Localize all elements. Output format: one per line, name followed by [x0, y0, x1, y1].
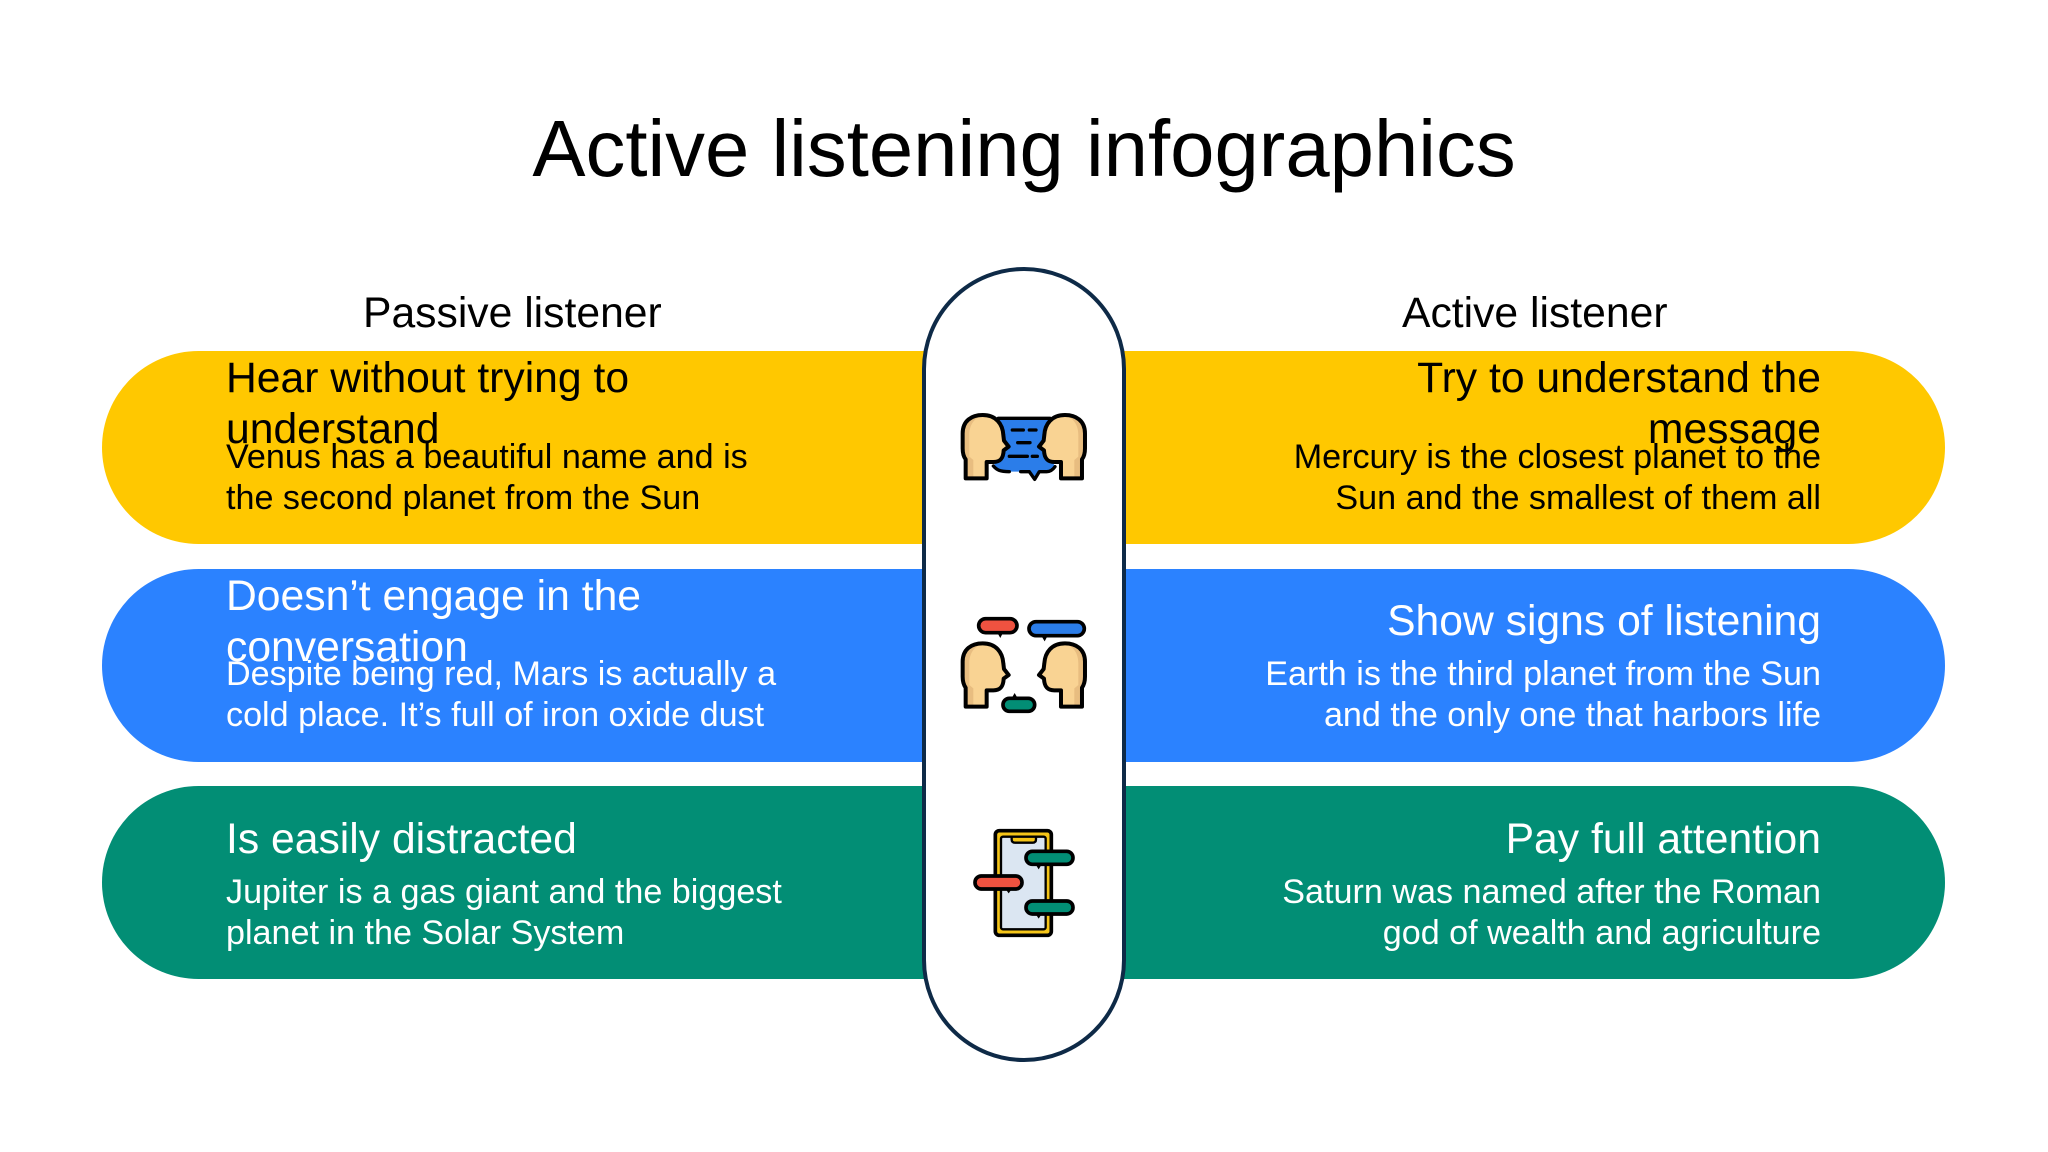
yellow band left	[102, 351, 962, 544]
text: mercury: Sun and the smallest of them all	[1335, 479, 1821, 517]
text: mars: cold place. It’s full of iron oxide dust	[226, 696, 764, 734]
text: jupiter: Jupiter is a gas giant and the biggest	[226, 873, 782, 911]
text: jupiter	[226, 873, 782, 952]
heading: hear without trying: Hear without trying to	[226, 354, 629, 402]
heading: pay full attention: Pay full attention	[1506, 815, 1821, 863]
column heading: passive listener: Passive listener	[363, 289, 662, 337]
heading: doesn't engage: Doesn’t engage in the	[226, 572, 641, 620]
text: mercury: Mercury is the closest planet to the	[1294, 438, 1821, 476]
yellow band right	[1085, 351, 1945, 544]
icon: two heads with separate speech bubbles	[963, 619, 1085, 711]
text: venus	[226, 438, 748, 517]
heading: show signs: Show signs of listening	[1387, 597, 1821, 645]
blue band left	[102, 569, 962, 762]
center capsule	[922, 267, 1126, 1062]
text: mars	[226, 655, 776, 734]
text: venus: the second planet from the Sun	[226, 479, 700, 517]
heading: doesn't engage: conversation	[226, 623, 468, 671]
heading: try to understand: message	[1648, 405, 1821, 453]
title: Active listening infographics	[532, 104, 1516, 193]
green band right	[1085, 786, 1945, 978]
text: earth: Earth is the third planet from the Sun	[1265, 655, 1821, 693]
column heading: active listener: Active listener	[1402, 289, 1668, 337]
heading: doesn't engage	[226, 572, 641, 671]
text: earth: and the only one that harbors life	[1324, 696, 1821, 734]
heading: try to understand: Try to understand the	[1417, 354, 1821, 402]
text: mars: Despite being red, Mars is actually a	[226, 655, 776, 693]
heading: hear without trying: understand	[226, 405, 439, 453]
heading: try to understand	[1417, 354, 1821, 453]
text: saturn	[1282, 873, 1821, 952]
text: earth	[1265, 655, 1821, 734]
green band left	[102, 786, 962, 978]
text: jupiter: planet in the Solar System	[226, 914, 624, 952]
text: venus: Venus has a beautiful name and is	[226, 438, 748, 476]
icon: two heads sharing a speech bubble	[963, 415, 1085, 479]
text: saturn: Saturn was named after the Roman	[1282, 873, 1821, 911]
text: saturn: god of wealth and agriculture	[1383, 914, 1821, 952]
icon: phone with chat bubbles	[975, 831, 1073, 935]
blue band right	[1085, 569, 1945, 762]
heading: easily distracted: Is easily distracted	[226, 815, 577, 863]
text: mercury	[1294, 438, 1821, 517]
heading: hear without trying	[226, 354, 629, 453]
